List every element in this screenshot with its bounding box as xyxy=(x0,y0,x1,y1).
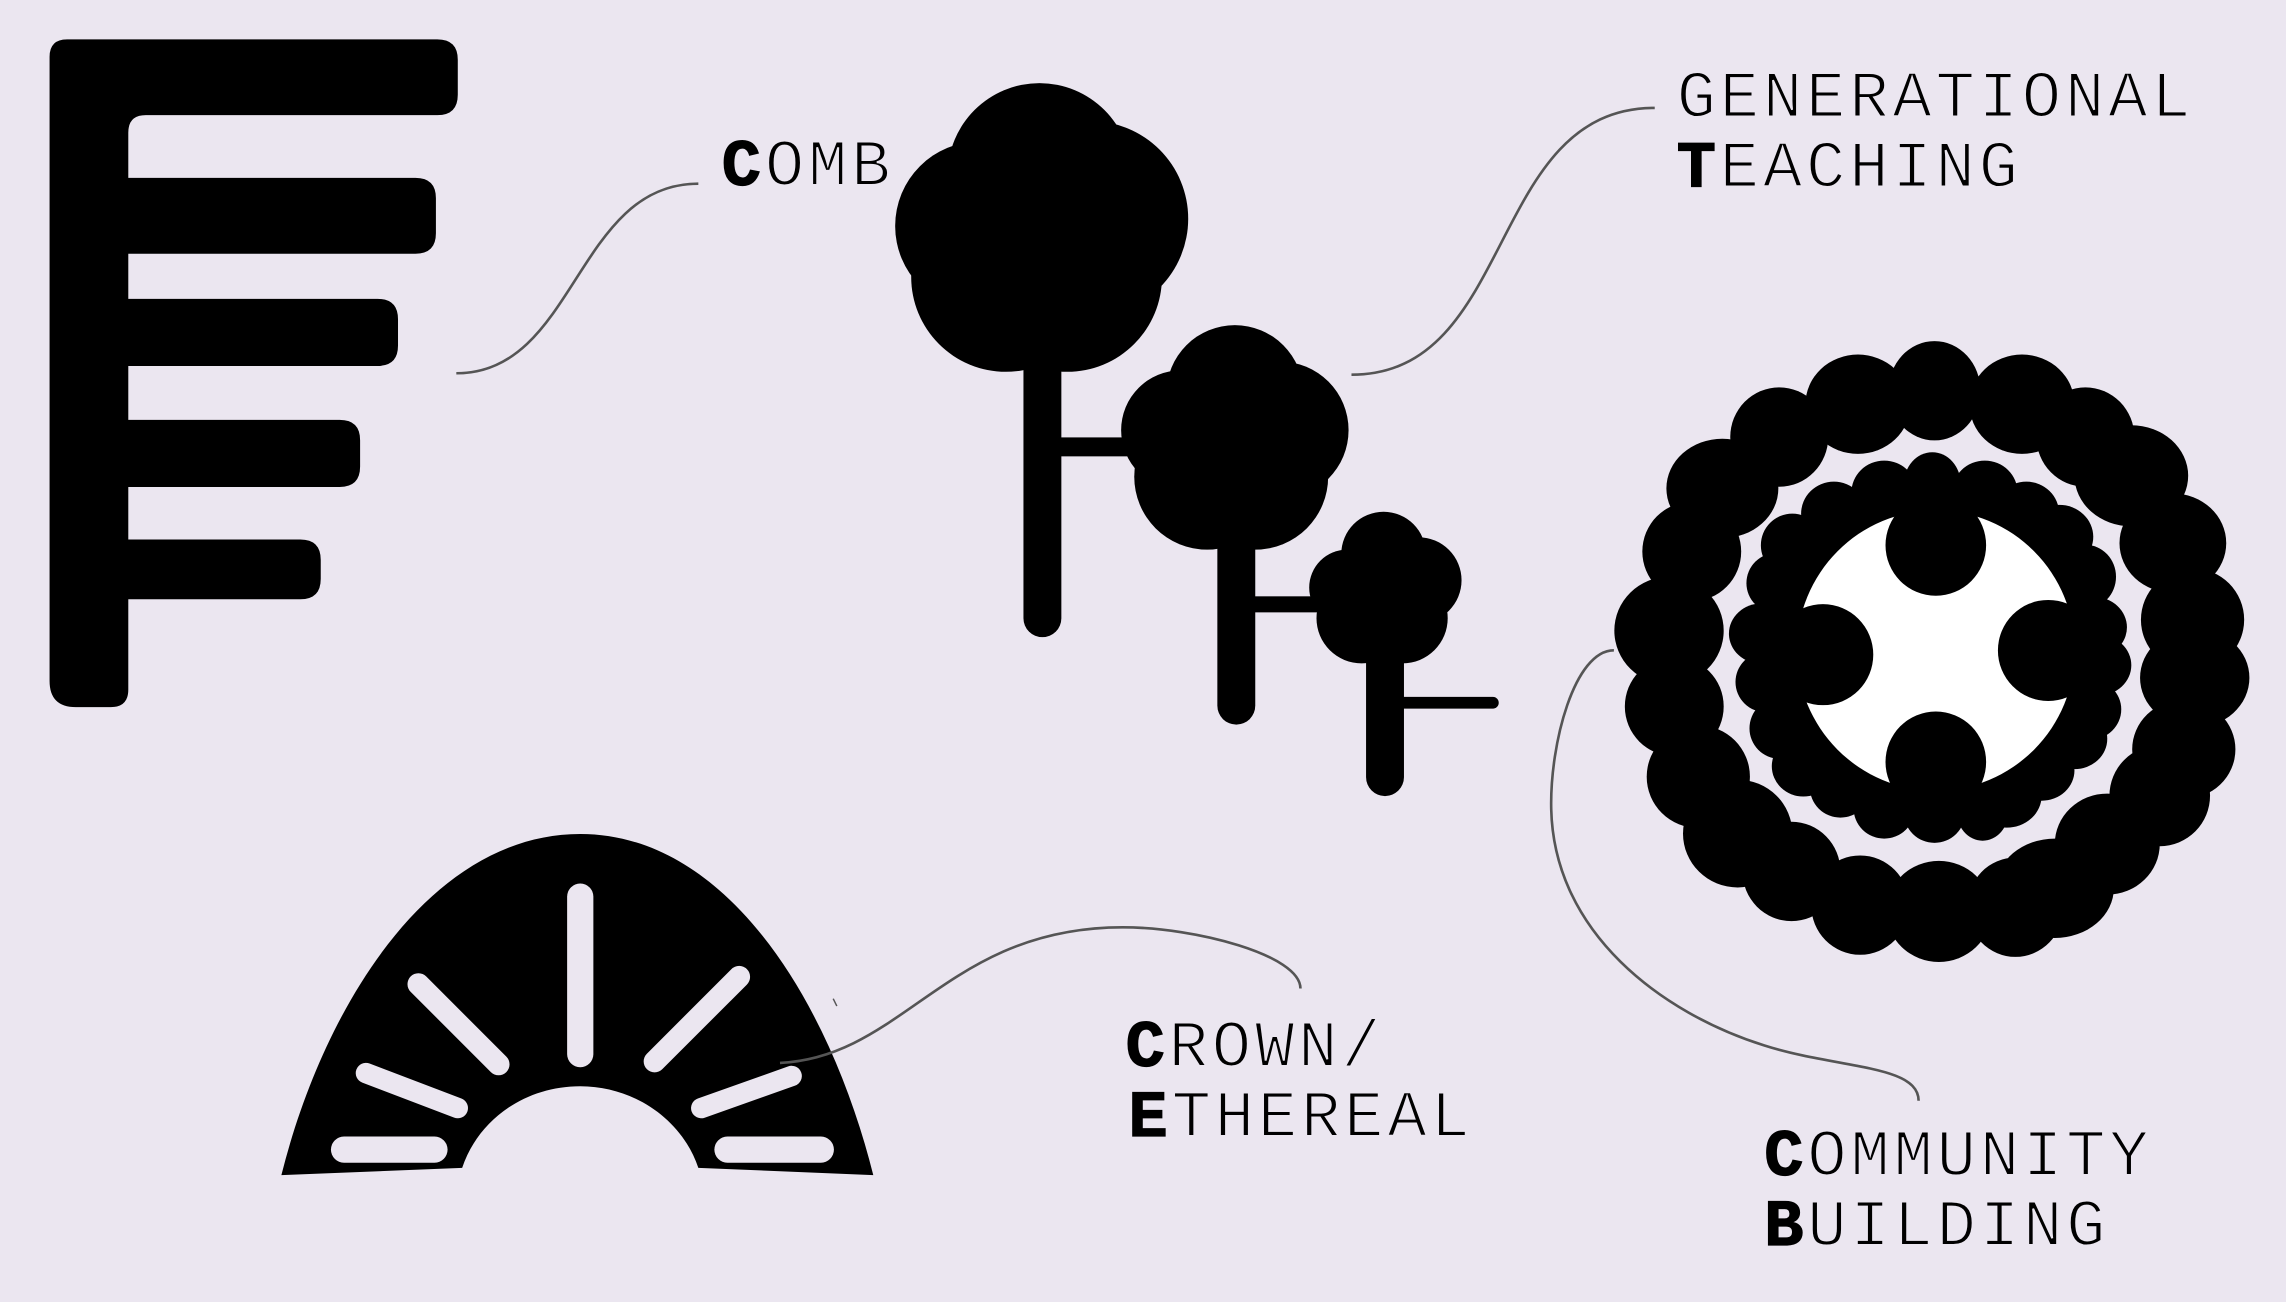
tree: small xyxy=(1309,512,1499,796)
label: comb: COMB xyxy=(722,130,894,205)
four inner blobs xyxy=(1773,495,2099,813)
callout line: community building xyxy=(1551,650,1919,1101)
label: generational teaching: GENERATIONAL xyxy=(1677,62,2194,137)
label: generational teaching: TEACHING xyxy=(1677,132,2022,207)
inner ring xyxy=(1729,452,2131,843)
icon: comb xyxy=(50,39,458,707)
callout line: generational teaching xyxy=(1351,108,1655,375)
callout line: comb xyxy=(456,184,698,373)
label: crown / ethereal xyxy=(1126,1011,1474,1156)
label: crown / ethereal: CROWN/ xyxy=(1126,1011,1384,1086)
icon: generational trees xyxy=(895,83,1499,796)
arch body xyxy=(281,834,873,1175)
label: community building: BUILDING xyxy=(1764,1190,2109,1265)
icon: crown arch xyxy=(281,834,873,1175)
label: crown / ethereal: ETHEREAL xyxy=(1128,1081,1474,1156)
outer ring xyxy=(1614,341,2249,962)
tree: large xyxy=(895,83,1188,637)
tree: medium xyxy=(1121,325,1349,725)
label: community building xyxy=(1764,1120,2152,1265)
crown slots xyxy=(344,897,821,1150)
white centre disc xyxy=(1797,510,2075,791)
label: community building: COMMUNITY xyxy=(1764,1120,2152,1195)
icon: community rings xyxy=(1614,341,2249,962)
label: generational teaching xyxy=(1677,62,2194,207)
callout line: crown xyxy=(780,927,1300,1063)
small stray tick near crown xyxy=(833,999,837,1006)
